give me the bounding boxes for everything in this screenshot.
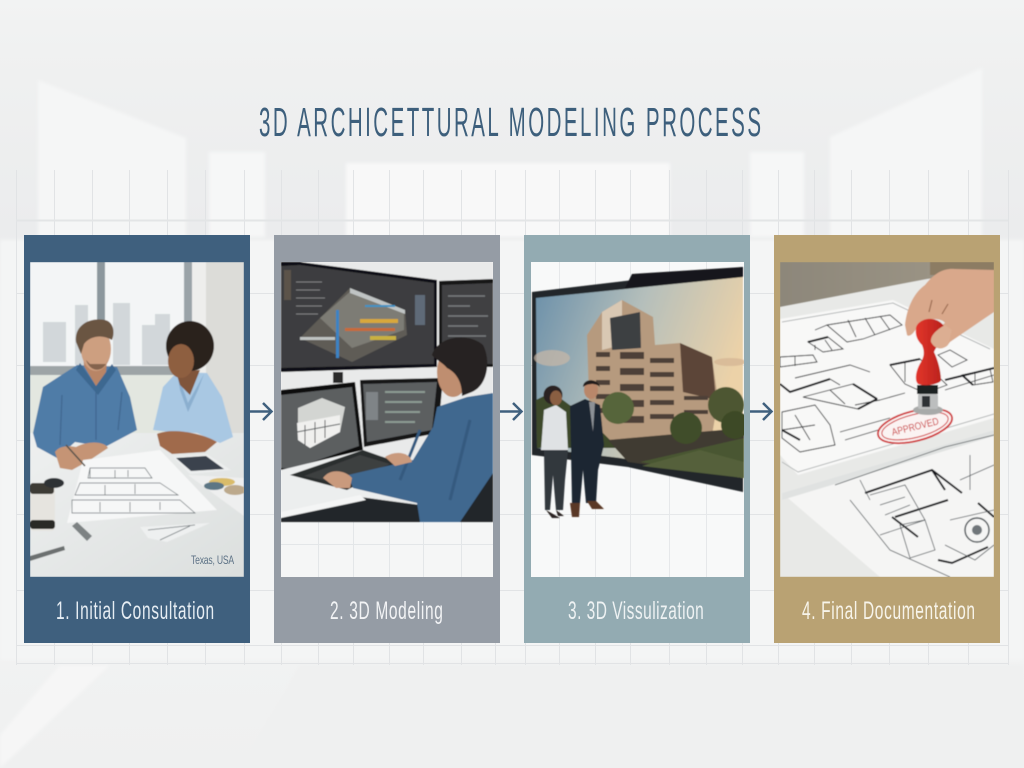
panel: step 3 3D visualization xyxy=(524,235,750,643)
arrow 2 to 3 xyxy=(500,403,522,420)
location caption: Texas, USA xyxy=(191,555,234,567)
photo: stamping approved floor plans xyxy=(780,262,994,577)
arrow 3 to 4 xyxy=(750,403,772,420)
photo: designer at multi-monitor workstation xyxy=(281,262,493,577)
step label 1: 1. Initial Consultation xyxy=(56,597,214,625)
panel: step 1 initial consultation xyxy=(24,235,250,643)
photo: clients viewing building render on a display xyxy=(531,262,749,577)
panel: step 2 3D modeling xyxy=(274,235,500,643)
step label 4: 4. Final Documentation xyxy=(802,597,975,625)
red approved stamp mark: APPROVED xyxy=(891,416,940,439)
red approved stamp mark xyxy=(876,408,954,445)
photo: client consultation at table xyxy=(30,262,246,577)
title: 3D ARCHICETTURAL MODELING PROCESS xyxy=(259,99,761,145)
couple standing in front of display xyxy=(541,380,604,518)
on-screen 3D building model xyxy=(284,270,425,362)
step label 2: 2. 3D Modeling xyxy=(330,597,443,625)
step label 3: 3. 3D Vissulization xyxy=(568,597,704,625)
panel: step 4 final documentation xyxy=(774,235,1000,643)
arrow 1 to 2 xyxy=(250,403,272,420)
